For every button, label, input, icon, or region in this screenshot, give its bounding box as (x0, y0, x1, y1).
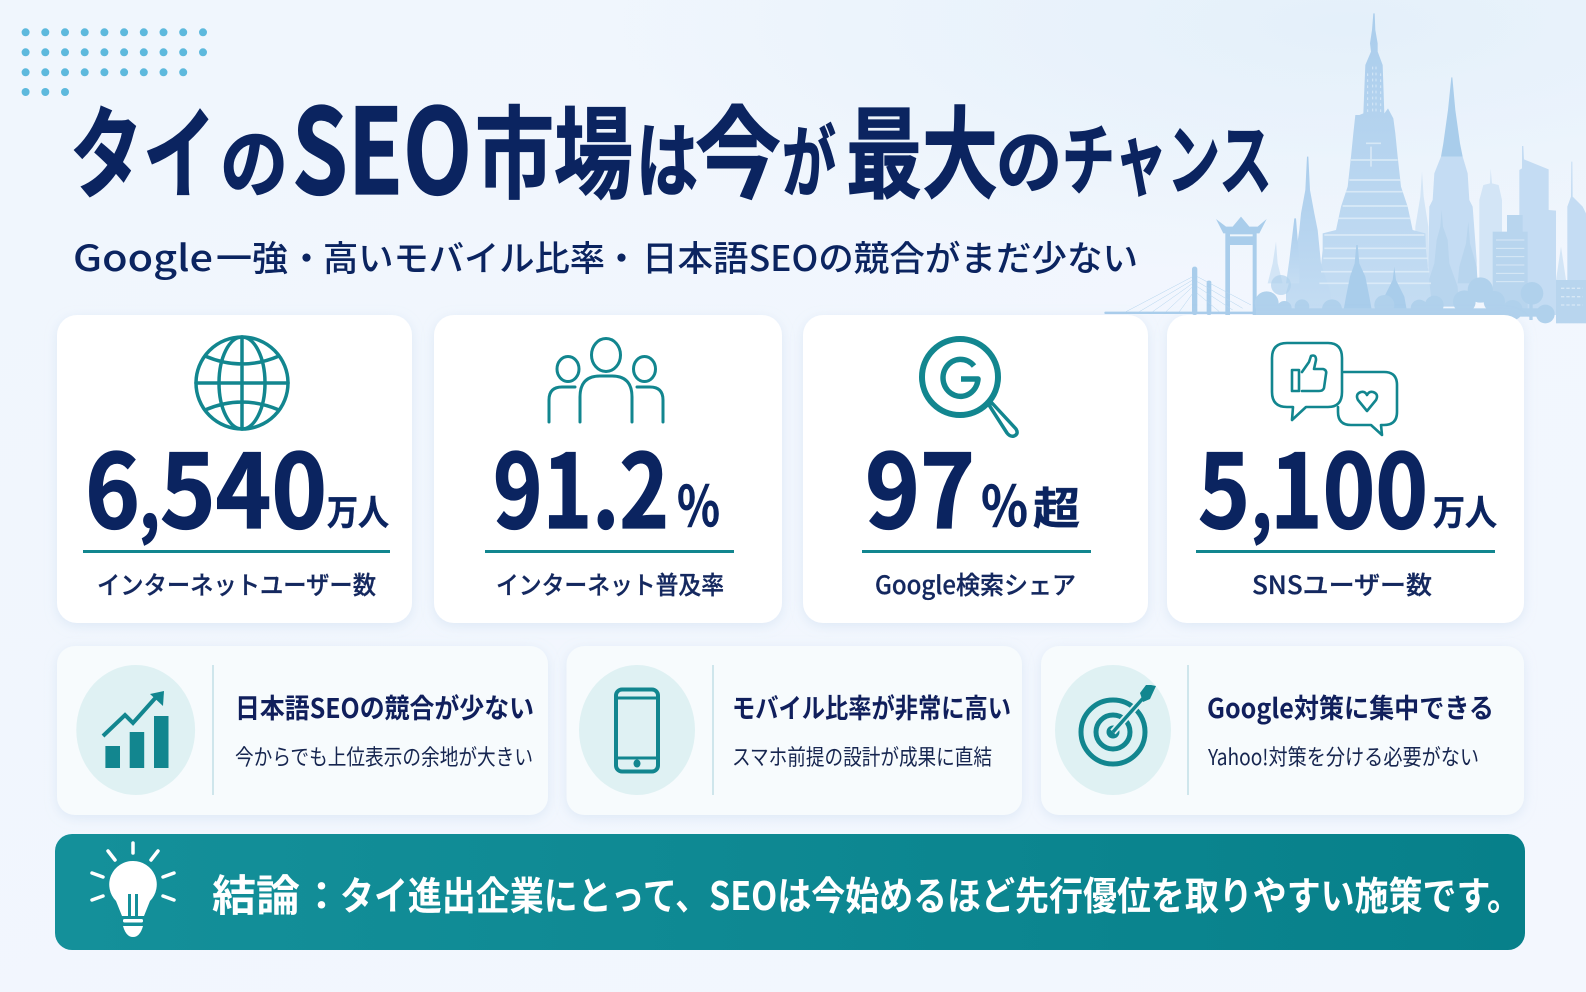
stat: 5,100万人: 5 (1198, 411, 1250, 558)
icon: growth chart (76, 665, 195, 795)
description: Yahoo!対策を分ける必要がない (1207, 740, 1479, 772)
icon: smartphone (579, 665, 695, 795)
divider (212, 665, 214, 795)
panel: Japanese SEO competition (57, 646, 548, 815)
stat: 91.2%: % (677, 462, 720, 543)
stat: 97%超 (865, 411, 1080, 558)
panel: internet users (57, 315, 412, 623)
title: 今 (695, 74, 781, 219)
title: 市場 (475, 74, 633, 219)
title: 最大 (846, 74, 998, 219)
conclusion banner (55, 834, 1525, 950)
stat: 97%超: 97 (865, 411, 975, 558)
subtitle (73, 230, 1138, 282)
subtitle: Google (73, 230, 213, 282)
icon: magnifier with G (922, 339, 1017, 436)
rule (862, 550, 1091, 553)
subtitle: ・ (289, 231, 324, 282)
subtitle: 高いモバイル比率 (323, 231, 605, 282)
rule (485, 550, 734, 553)
stat: 5,100万人 (1198, 411, 1497, 558)
icon: target with arrow (1055, 665, 1171, 795)
icon: globe (196, 337, 288, 429)
stat: 5,100万人: 100 (1270, 411, 1428, 558)
panel: Google share (803, 315, 1148, 623)
subtitle: 一強 (216, 231, 288, 282)
decorative dot grid (22, 28, 207, 96)
divider (1187, 665, 1189, 795)
title: SEO (292, 57, 472, 228)
stat: 6,540万人: 万人 (327, 485, 389, 536)
label: インターネットユーザー数 (97, 566, 376, 602)
title (70, 57, 1272, 228)
panel: mobile ratio (566, 646, 1022, 815)
description: スマホ前提の設計が成果に直結 (732, 740, 992, 772)
label: Google検索シェア (875, 566, 1076, 602)
stat: 91.2%: 91.2 (493, 411, 669, 558)
subtitle: 日本語SEOの競合がまだ少ない (642, 231, 1138, 282)
panel: SNS users (1167, 315, 1524, 623)
heading: Google対策に集中できる (1207, 687, 1494, 726)
stat: 6,540万人: , (139, 436, 160, 552)
title: が (782, 101, 836, 213)
panel: internet penetration (434, 315, 782, 623)
title: チャンス (1062, 99, 1272, 211)
title: タイ (70, 74, 216, 219)
stat: 97%超: 超 (1033, 473, 1080, 537)
description: 今からでも上位表示の余地が大きい (235, 740, 533, 772)
divider (712, 665, 714, 795)
rule (83, 550, 390, 553)
icon: people (549, 338, 663, 422)
stat: 97%超: % (981, 462, 1028, 543)
rule (1196, 550, 1495, 553)
label: SNSユーザー数 (1252, 566, 1432, 602)
stat: 5,100万人: , (1251, 436, 1272, 552)
title: は (636, 95, 698, 214)
illustration: Bangkok skyline (1104, 13, 1586, 323)
title: の (220, 103, 288, 213)
stat: 6,540万人 (85, 411, 389, 558)
heading: モバイル比率が非常に高い (732, 687, 1011, 726)
label: インターネット普及率 (496, 566, 724, 602)
stat: 6,540万人: 540 (160, 411, 327, 558)
icon: light bulb (92, 843, 174, 937)
panel: Google focus (1041, 646, 1524, 815)
icon: chat bubbles (1272, 343, 1397, 435)
stat: 5,100万人: 万人 (1433, 485, 1497, 536)
conclusion text: ： (302, 866, 341, 922)
heading: 日本語SEOの競合が少ない (235, 687, 534, 726)
stat: 6,540万人: 6 (85, 411, 140, 558)
conclusion text: 結論 (212, 862, 300, 924)
title: の (996, 107, 1062, 208)
subtitle: ・ (604, 231, 639, 282)
